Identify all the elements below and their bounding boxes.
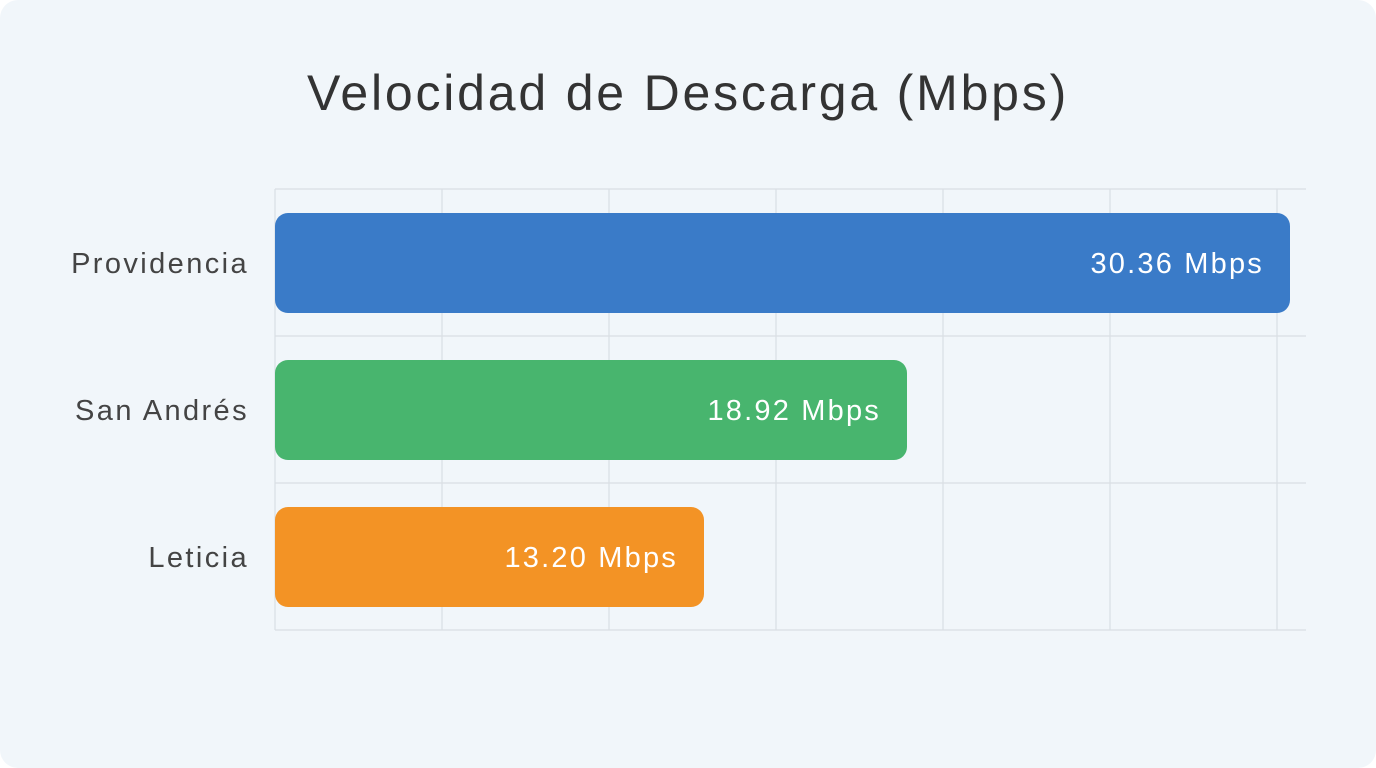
bar: Providencia (275, 213, 1290, 313)
label: San Andrés: San Andrés (75, 395, 249, 427)
bar: San Andrés: 18.92 Mbps (707, 395, 881, 427)
bar: Leticia (275, 507, 704, 607)
label: Leticia: Leticia (148, 542, 249, 574)
label: Providencia: Providencia (71, 248, 249, 280)
title: Velocidad de Descarga (Mbps) (307, 65, 1069, 121)
bar: Leticia: 13.20 Mbps (504, 542, 678, 574)
bar: San Andrés (275, 360, 907, 460)
bar: Providencia: 30.36 Mbps (1090, 248, 1264, 280)
